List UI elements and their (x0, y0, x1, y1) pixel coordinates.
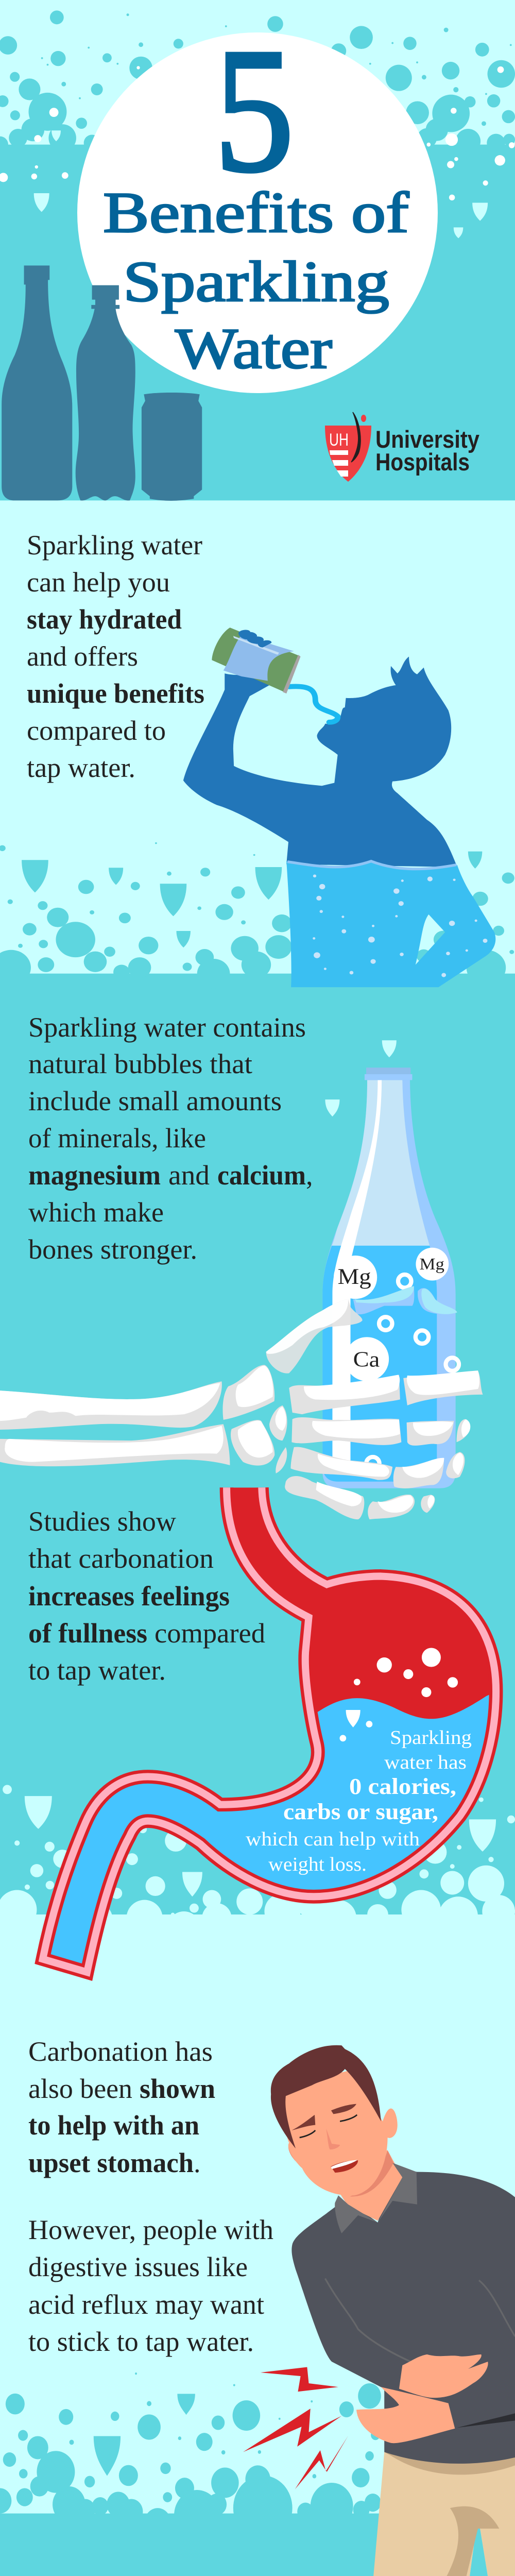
man: upper body (183, 656, 457, 867)
text: fullness: compared (154, 1618, 265, 1649)
mineral: magnesium (334, 1256, 377, 1299)
text: stay hydrated: compared to (27, 715, 166, 746)
text: minerals: Sparkling water contains (28, 1012, 306, 1043)
text: stay hydrated: tap water. (27, 752, 135, 783)
text inside stomach: which can help with (246, 1828, 420, 1850)
bubbles and foam below text (0, 2372, 394, 2576)
text: upset stomach: . (194, 2147, 201, 2178)
title circle (77, 32, 438, 393)
text: minerals: include small amounts (28, 1086, 282, 1116)
text: upset stomach: Carbonation has (28, 2036, 213, 2067)
logo: University Hospitals: Hospitals (375, 448, 470, 476)
text: stay hydrated (27, 530, 204, 783)
header illustration background: bubbles and foam (0, 10, 515, 500)
water surface line (287, 861, 457, 869)
text inside stomach: water has (384, 1752, 467, 1773)
text: minerals: which make (28, 1197, 164, 1228)
text: stay hydrated: Sparkling water (27, 530, 202, 561)
pain bolts (243, 2367, 348, 2489)
title: 5 (214, 12, 294, 209)
text: upset stomach: to stick to tap water. (28, 2326, 254, 2357)
title: Water (175, 317, 332, 381)
illustration: man with stomach ache (243, 2045, 515, 2576)
text: upset stomach: However, people with (28, 2214, 273, 2245)
text: upset stomach: to help with an (28, 2110, 199, 2141)
neck and collar (305, 2150, 417, 2233)
text inside stomach: 0 calories, (349, 1774, 456, 1799)
skeleton forearm and hand (0, 1365, 483, 1519)
text: fullness: to tap water. (28, 1655, 166, 1686)
trousers (373, 2452, 515, 2576)
droplets (325, 1040, 397, 1116)
section background: teal band (0, 987, 515, 1914)
text: stay hydrated: and offers (27, 641, 138, 672)
foam and bubbles under stomach (0, 1785, 515, 2010)
mineral: calcium: Ca (353, 1348, 380, 1372)
text: fullness (28, 1506, 265, 1686)
soda can (212, 628, 301, 693)
mineral: magnesium small: Mg (419, 1255, 444, 1273)
bubbles inside water (313, 874, 487, 977)
text: minerals: natural bubbles that (28, 1048, 252, 1079)
bubbles and foam below drinking man (0, 842, 515, 988)
title (103, 12, 409, 381)
logo: University Hospitals: University (375, 426, 479, 453)
text: fullness: increases feelings (28, 1581, 230, 1612)
mineral: magnesium small (416, 1248, 449, 1281)
text: upset stomach (28, 2036, 273, 2357)
text: minerals: and (168, 1160, 210, 1191)
text: upset stomach: digestive issues like (28, 2251, 248, 2282)
stomach bubbles (339, 1648, 458, 1741)
text: fullness: Studies show (28, 1506, 176, 1537)
illustration: bottle with minerals held by skeleton hand (0, 1040, 483, 1519)
logo: University Hospitals (325, 412, 479, 482)
illustration: man drinking sparkling water (183, 628, 495, 987)
text: stay hydrated: unique benefits (27, 678, 204, 709)
text: minerals: bones stronger. (28, 1234, 197, 1265)
title: Sparkling (123, 250, 389, 314)
legs gap (470, 2515, 488, 2576)
text: upset stomach: shown (140, 2073, 215, 2104)
text: minerals: , (306, 1160, 313, 1191)
text: minerals (28, 1012, 313, 1265)
man: submerged lower body (286, 861, 495, 987)
text inside stomach: Sparkling (390, 1727, 472, 1749)
text: minerals: magnesium (28, 1160, 161, 1191)
sweater (291, 2168, 515, 2464)
water stream (289, 686, 338, 722)
text: upset stomach: acid reflux may want (28, 2289, 264, 2320)
head (271, 2045, 398, 2196)
text: stay hydrated: can help you (27, 567, 170, 598)
hands (356, 2354, 515, 2443)
text: minerals: of minerals, like (28, 1123, 206, 1154)
text: minerals: calcium (217, 1160, 306, 1191)
text: fullness: that carbonation (28, 1543, 214, 1574)
bottle and can silhouettes (2, 265, 202, 501)
bottle (322, 1067, 456, 1488)
skeleton thumb and finger pads behind (266, 1286, 457, 1374)
text: upset stomach: upset stomach (28, 2147, 194, 2178)
text inside stomach: carbs or sugar, (283, 1799, 438, 1824)
mineral: calcium (345, 1337, 389, 1381)
illustration: stomach (35, 1487, 503, 1981)
logo: University Hospitals: UH (329, 430, 349, 450)
text inside stomach: weight loss. (268, 1854, 367, 1875)
title: Benefits of (103, 181, 409, 245)
text: stay hydrated: stay hydrated (27, 604, 182, 635)
mineral: magnesium: Mg (338, 1264, 371, 1289)
bubble rings (366, 1275, 459, 1470)
text: upset stomach: also been (28, 2073, 132, 2104)
text: fullness: of fullness (28, 1618, 147, 1649)
text inside stomach (246, 1727, 472, 1875)
